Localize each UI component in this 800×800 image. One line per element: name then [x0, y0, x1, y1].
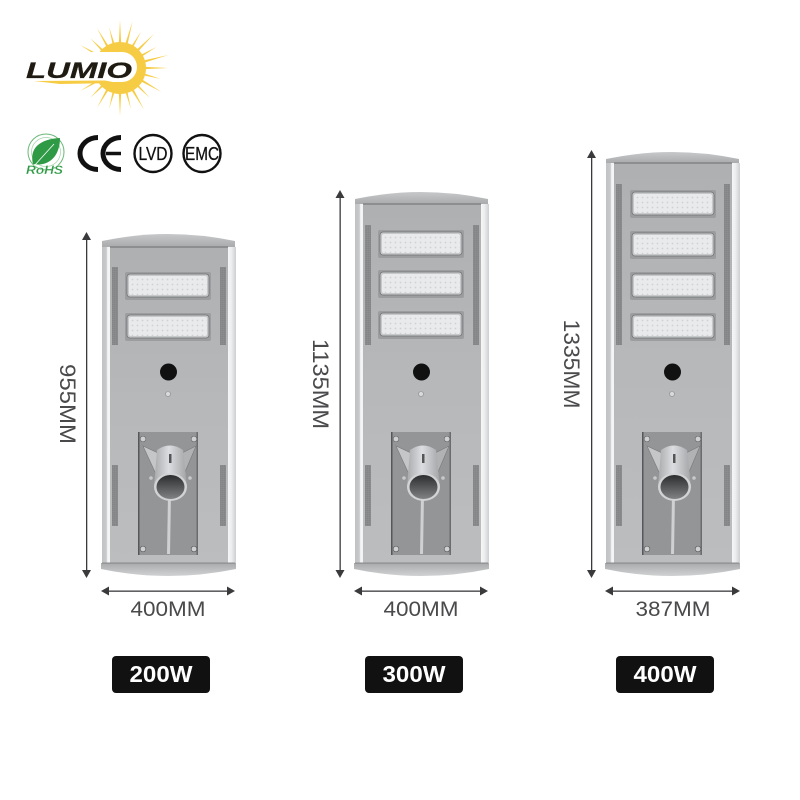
lamp: 400W [605, 152, 740, 576]
label: 387MM: 387MM [636, 597, 710, 621]
swoosh [34, 80, 118, 84]
pole bracket [616, 432, 730, 555]
badge: 300W: 300W [382, 661, 446, 687]
badge: 200W [112, 656, 210, 693]
lamp: 300W [354, 192, 489, 576]
icon: sun rays [79, 20, 169, 116]
arrow: width 400W [605, 586, 740, 596]
label: 1135MM: 1135MM [308, 339, 333, 429]
pole bracket [112, 432, 226, 555]
icon: LVD [134, 135, 172, 172]
arrow: width 300W [354, 586, 488, 596]
certification icons [26, 134, 220, 177]
label: 400MM left: 400MM [130, 597, 206, 621]
icon: CE mark [80, 138, 121, 170]
wordmark: LUMIO [26, 58, 132, 83]
lamp: 200W [101, 234, 236, 576]
badge: 300W [365, 656, 463, 693]
arrow: height 955MM [82, 232, 91, 578]
LED modules [125, 272, 211, 341]
arrow: height 1335MM [587, 150, 596, 578]
label: 400MM middle: 400MM [384, 597, 458, 621]
badge: 400W: 400W [634, 661, 697, 687]
pole bracket [365, 432, 479, 555]
white cut-out behind the wordmark [20, 52, 137, 82]
label: 1335MM: 1335MM [559, 320, 584, 408]
label: 955MM: 955MM [55, 364, 80, 444]
icon: EMC: EMC [185, 144, 219, 164]
icon: EMC [184, 135, 220, 172]
logo: Lumio sun [20, 20, 169, 116]
sensor [413, 364, 430, 396]
arrow: width 200W [101, 586, 235, 596]
sensor [160, 364, 177, 396]
LED modules [378, 230, 464, 339]
icon: RoHS: RoHS [26, 165, 63, 177]
arrow: height 1135MM [336, 190, 344, 578]
badge: 200W: 200W [130, 661, 193, 687]
icon: LVD: LVD [138, 144, 168, 164]
sensor [664, 364, 681, 396]
icon: RoHS [26, 134, 64, 177]
badge: 400W [616, 656, 714, 693]
LED modules [630, 190, 716, 341]
